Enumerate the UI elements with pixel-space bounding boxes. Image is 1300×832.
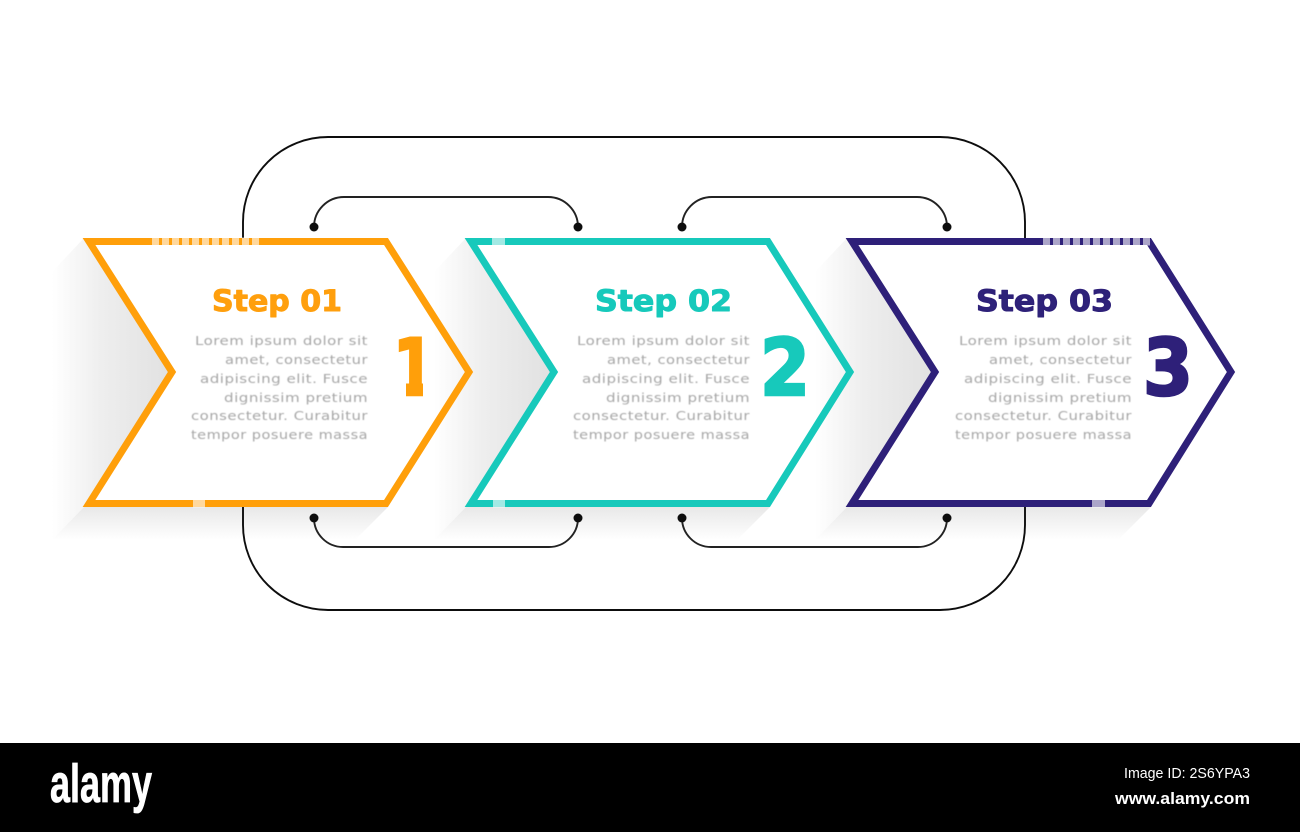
arrow outline orange [89,242,469,504]
text block: step 2: consectetur. Curabitur [573,409,750,423]
outer loop connector [243,137,1025,610]
text block: step 2: Lorem ipsum dolor sit [577,334,750,348]
panel: step 3 arrow [852,242,1231,504]
number 1: 1 [393,324,435,414]
text block: step 2 [573,334,750,442]
text block: step 2: tempor posuere massa [573,428,750,442]
text block: step 1 [191,334,368,442]
text block: step 1: consectetur. Curabitur [191,409,368,423]
bottom connector: step 2 to step 3 [678,514,952,547]
text block: step 2: dignissim pretium [606,391,750,405]
footer bar [0,743,1300,832]
panel: step 1 arrow [89,242,469,504]
top connector: step 1 to step 2 [310,197,582,232]
text block: step 3 [955,334,1132,442]
text block: step 3: consectetur. Curabitur [955,409,1132,423]
number 2: 2 [760,324,810,414]
watermark flecks on arrow edges [152,242,1150,504]
website: www.alamy.com [1114,789,1250,808]
top connector: step 2 to step 3 [678,197,952,232]
bottom connector: step 1 to step 2 [310,514,582,547]
text block: step 1: Lorem ipsum dolor sit [195,334,368,348]
text block: step 3: Lorem ipsum dolor sit [959,334,1132,348]
heading: step 02: Step 02 [595,284,732,318]
text block: step 1: adipiscing elit. Fusce [200,372,368,386]
arrow outline navy [852,242,1231,504]
arrow outline teal [471,242,850,504]
text block: step 2: amet, consectetur [607,353,750,367]
panel: step 2 arrow [471,242,850,504]
text block: step 2: adipiscing elit. Fusce [582,372,750,386]
text block: step 3: adipiscing elit. Fusce [964,372,1132,386]
drop shadows behind arrows [52,238,1151,540]
image id: Image ID: 2S6YPA3 [1124,765,1250,782]
number 3: 3 [1143,324,1193,414]
heading: step 03: Step 03 [976,284,1113,318]
heading: step 01: Step 01 [212,284,342,318]
footer logo: alamy [50,754,152,814]
text block: step 1: dignissim pretium [224,391,368,405]
text block: step 1: amet, consectetur [225,353,368,367]
text block: step 3: amet, consectetur [989,353,1132,367]
text block: step 1: tempor posuere massa [191,428,368,442]
text block: step 3: tempor posuere massa [955,428,1132,442]
text block: step 3: dignissim pretium [988,391,1132,405]
